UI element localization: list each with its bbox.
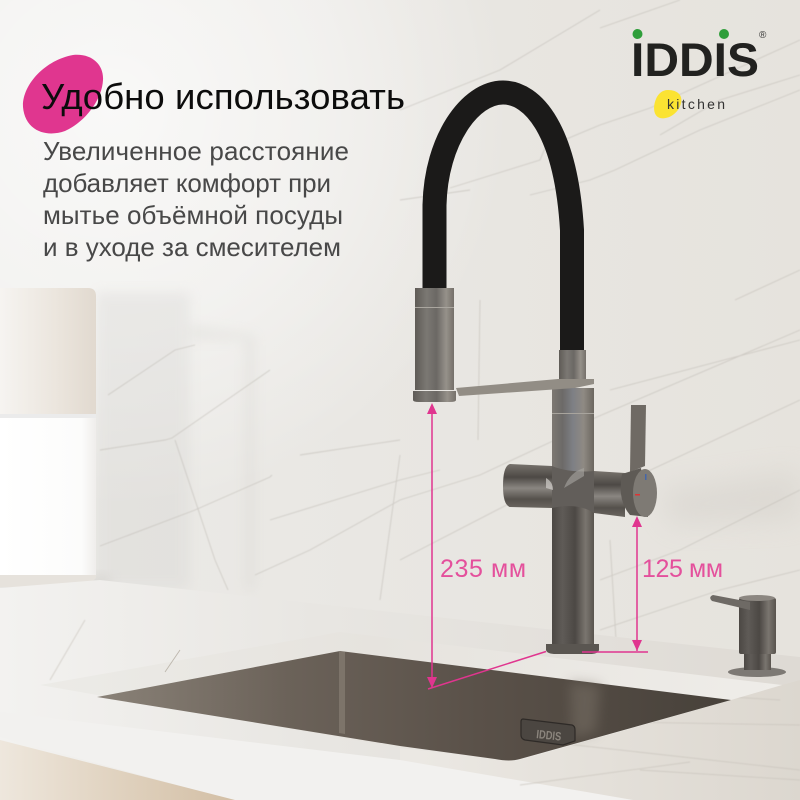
body text: и в уходе за смесителем <box>43 232 341 262</box>
pink heading blob <box>23 55 103 133</box>
handle cap <box>621 468 657 517</box>
body text: мытье объёмной посуды <box>43 200 343 230</box>
body text: Увеличенное расстояние <box>43 136 349 166</box>
pull-down spray head <box>413 288 456 402</box>
kitchen sub-logo: kitchen <box>667 96 725 112</box>
kitchen faucet <box>413 92 657 654</box>
countertop <box>0 580 800 800</box>
upper collar <box>559 350 586 380</box>
body text <box>43 136 349 262</box>
black flexible hose <box>434 92 572 352</box>
IDDIS logo: ® <box>759 30 767 41</box>
body text: добавляет комфорт при <box>43 168 331 198</box>
cross body handle <box>503 464 625 517</box>
sink drain cover with logo <box>521 719 575 745</box>
sink drain cover with logo: IDDIS <box>536 727 562 744</box>
label: 125 mm: 125 мм <box>642 555 723 583</box>
baseline at faucet <box>582 651 648 653</box>
dimension lines <box>427 403 648 689</box>
arrow: spout height <box>427 403 437 688</box>
IDDIS logo: IDDIS <box>631 33 759 86</box>
arrow: handle height <box>632 516 642 651</box>
wood cabinet front <box>0 740 235 800</box>
base flange <box>546 644 599 654</box>
undermount sink <box>40 632 782 761</box>
lever handle <box>630 405 646 472</box>
heading: Удобно использовать <box>41 76 405 117</box>
kitchen sub-logo <box>654 90 725 118</box>
label: 235 mm: 235 мм <box>440 555 526 583</box>
faucet column <box>552 388 594 646</box>
white and beige canister <box>0 288 110 592</box>
baseline at sink <box>428 652 546 689</box>
soap dispenser <box>710 595 786 677</box>
swivel arm <box>456 379 594 396</box>
